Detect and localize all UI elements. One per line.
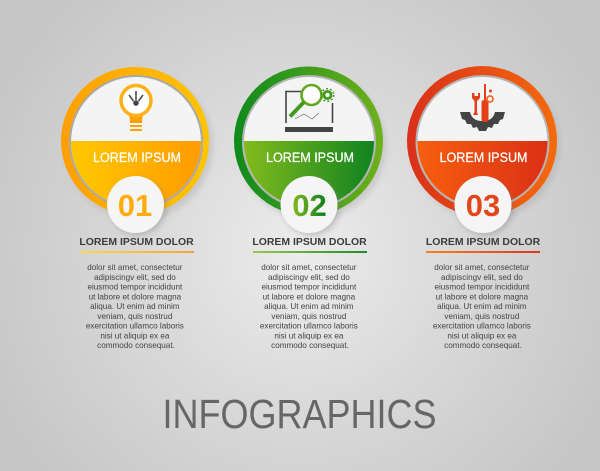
body text: ut labore et dolore magna: [263, 292, 356, 302]
icon: laptop with magnifier: [285, 85, 334, 132]
band label: LOREM IPSUM: [93, 150, 181, 165]
number badge: 01: [118, 188, 152, 223]
body text: commodo consequat.: [271, 341, 349, 350]
body text: veniam, quis nostrud: [444, 312, 519, 321]
body text: adipiscingv elit, sed do: [268, 273, 350, 282]
badge: red circle: [407, 66, 560, 220]
band label: LOREM IPSUM: [440, 150, 528, 165]
panel: step 03: [407, 66, 560, 350]
body text: veniam, quis nostrud: [97, 312, 172, 321]
body text: aliqua. Ut enim ad minim: [90, 302, 180, 311]
number badge: [280, 176, 340, 236]
panel: step 01: [61, 67, 213, 350]
divider: [253, 251, 367, 253]
body text: exercitation ullamco laboris: [86, 322, 184, 330]
body text: nisi ut aliquip ex ea: [100, 332, 170, 340]
band label: LOREM IPSUM: [266, 150, 354, 165]
body text: commodo consequat.: [97, 341, 175, 350]
body text: dolor sit amet, consectetur: [434, 263, 530, 272]
badge: green circle: [234, 66, 386, 220]
body text: exercitation ullamco laboris: [260, 322, 358, 330]
subheading: LOREM IPSUM DOLOR: [79, 237, 194, 248]
body text: adipiscingv elit, sed do: [94, 273, 176, 282]
badge: yellow circle: [61, 67, 213, 220]
body text: dolor sit amet, consectetur: [261, 263, 357, 272]
body text: nisi ut aliquip ex ea: [447, 332, 517, 340]
subheading: LOREM IPSUM DOLOR: [426, 237, 541, 248]
subheading: LOREM IPSUM DOLOR: [252, 237, 367, 248]
title: INFOGRAPHICS: [162, 391, 436, 437]
body text: ut labore et dolore magna: [89, 292, 182, 302]
body text: veniam, quis nostrud: [271, 312, 346, 321]
body text: aliqua. Ut enim ad minim: [437, 302, 527, 311]
body text: eiusmod tempor incididunt: [261, 282, 357, 292]
body text: exercitation ullamco laboris: [433, 322, 531, 330]
body text: nisi ut aliquip ex ea: [274, 332, 344, 340]
body text: dolor sit amet, consectetur: [87, 263, 183, 272]
number badge: [454, 176, 514, 236]
body text: aliqua. Ut enim ad minim: [264, 302, 354, 311]
number badge: 03: [466, 188, 500, 223]
number badge: [107, 176, 166, 236]
body text: commodo consequat.: [444, 341, 522, 350]
body text: eiusmod tempor incididunt: [434, 282, 530, 292]
icon: light bulb: [121, 86, 151, 131]
body text: eiusmod tempor incididunt: [87, 282, 183, 292]
icon: tools and gear: [460, 84, 505, 131]
panel: step 02: [234, 66, 386, 350]
body text: ut labore et dolore magna: [436, 292, 529, 302]
number badge: 02: [292, 188, 327, 223]
divider: [426, 251, 540, 253]
divider: [80, 251, 194, 253]
body text: adipiscingv elit, sed do: [441, 273, 523, 282]
